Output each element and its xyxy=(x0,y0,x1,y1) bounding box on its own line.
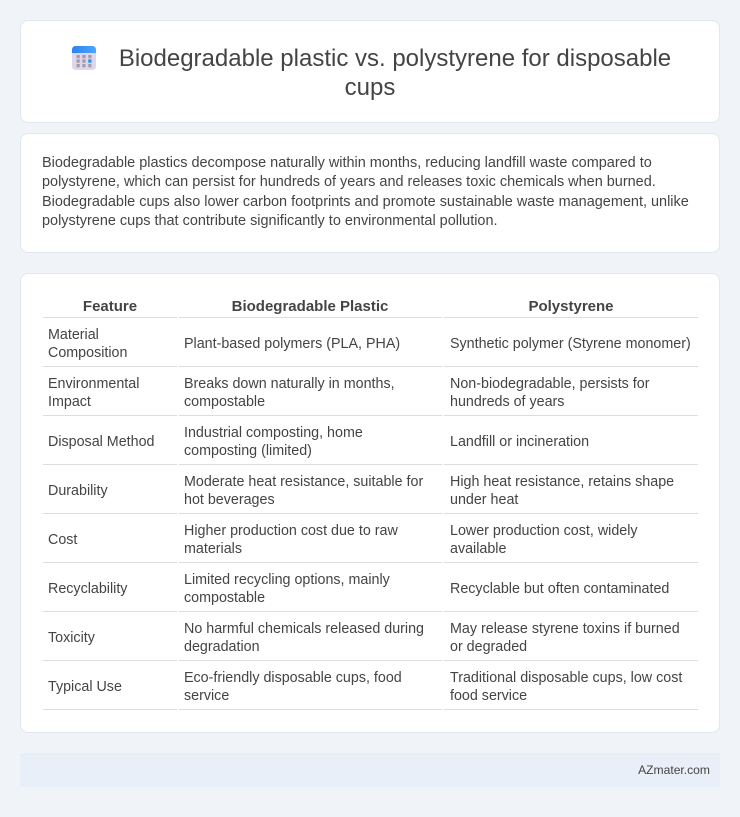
row: Recyclability: Recyclability xyxy=(48,581,127,597)
title xyxy=(119,45,671,101)
row: Cost xyxy=(48,523,638,557)
row: Environmental Impact: Impact xyxy=(48,394,91,410)
row: Environmental Impact xyxy=(48,376,650,410)
row: Durability: Durability xyxy=(48,483,108,499)
row: Typical Use: food service xyxy=(450,688,527,704)
row: Environmental Impact: Breaks down naturally in months, xyxy=(184,376,395,392)
row: Durability: hot beverages xyxy=(184,492,275,508)
row: Toxicity: or degraded xyxy=(450,639,527,655)
row: Material Composition: Plant-based polymers (PLA, PHA) xyxy=(184,336,400,352)
table header: Polystyrene xyxy=(528,298,614,315)
row: Cost: available xyxy=(450,541,506,557)
table header xyxy=(83,298,614,315)
row: Environmental Impact: hundreds of years xyxy=(450,394,564,410)
title: cups xyxy=(345,74,395,101)
row: Material Composition: Synthetic polymer (Styrene monomer) xyxy=(450,336,691,352)
row: Disposal Method: composting (limited) xyxy=(184,443,312,459)
panel: summary xyxy=(20,133,720,253)
row: Recyclability xyxy=(48,572,669,606)
row: Disposal Method: Industrial composting, home xyxy=(184,425,363,441)
row: Durability: High heat resistance, retains shape xyxy=(450,474,674,490)
row: Disposal Method: Disposal Method xyxy=(48,434,154,450)
row: Disposal Method xyxy=(48,425,589,459)
table header: Biodegradable Plastic xyxy=(232,298,388,315)
row: Environmental Impact: compostable xyxy=(184,394,265,410)
row: Toxicity: May release styrene toxins if burned xyxy=(450,621,680,637)
icon: calendar xyxy=(72,46,96,70)
footer bar xyxy=(20,753,720,787)
text block: summary paragraph: polystyrene, which can persist for hundreds of years and releases toxic chemicals when burned. xyxy=(42,174,656,190)
row: Cost: materials xyxy=(184,541,242,557)
text block: summary paragraph: Biodegradable cups also lower carbon footprints and promote sustainable waste management, unlike xyxy=(42,194,689,210)
row: Typical Use: Typical Use xyxy=(48,679,122,695)
row: Cost: Higher production cost due to raw xyxy=(184,523,398,539)
row: Cost: Cost xyxy=(48,532,77,548)
row: Recyclability: Recyclable but often contaminated xyxy=(450,581,669,597)
title: Biodegradable plastic vs. polystyrene for disposable xyxy=(119,45,671,72)
row: Toxicity xyxy=(48,621,680,655)
row: Environmental Impact: Non-biodegradable, persists for xyxy=(450,376,649,392)
text block: summary paragraph: Biodegradable plastics decompose naturally within months, reducing landfill waste compared to xyxy=(42,155,652,171)
row: Material Composition xyxy=(48,327,691,361)
text block: summary paragraph xyxy=(42,155,689,229)
row: Typical Use xyxy=(48,670,682,704)
row: Disposal Method: Landfill or incineration xyxy=(450,434,589,450)
row: Cost: Lower production cost, widely xyxy=(450,523,638,539)
row: Typical Use: service xyxy=(184,688,229,704)
row: Recyclability: compostable xyxy=(184,590,265,606)
text block: summary paragraph: polystyrene cups that contribute significantly to environmental pollution. xyxy=(42,213,498,229)
row: Typical Use: Traditional disposable cups, low cost xyxy=(450,670,682,686)
row: Toxicity: Toxicity xyxy=(48,630,95,646)
panel: comparison table xyxy=(20,273,720,733)
row: Material Composition: Material xyxy=(48,327,99,343)
row: Recyclability: Limited recycling options, mainly xyxy=(184,572,390,588)
row: Environmental Impact: Environmental xyxy=(48,376,139,392)
table header: Feature xyxy=(83,298,137,315)
row: Durability xyxy=(48,474,674,508)
row: Durability: Moderate heat resistance, suitable for xyxy=(184,474,423,490)
row: Durability: under heat xyxy=(450,492,518,508)
row: Toxicity: No harmful chemicals released during xyxy=(184,621,424,637)
row: Material Composition: Composition xyxy=(48,345,127,361)
row: Typical Use: Eco-friendly disposable cups, food xyxy=(184,670,402,686)
footer: site credit: AZmater.com xyxy=(638,763,710,777)
row: Toxicity: degradation xyxy=(184,639,260,655)
panel: title card xyxy=(20,20,720,123)
